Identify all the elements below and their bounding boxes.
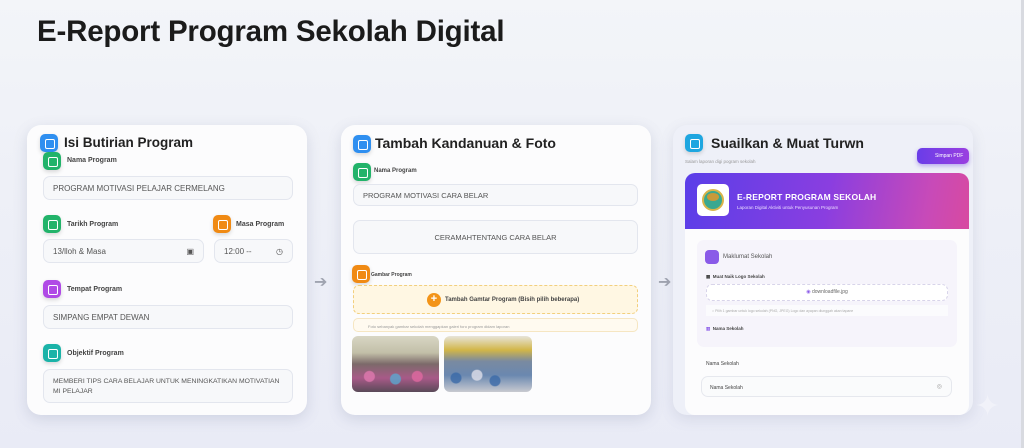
icon: header [685, 134, 703, 152]
label: Nama Sekolah [706, 361, 739, 367]
icon [705, 250, 719, 264]
photo 1 [352, 336, 439, 392]
input masa: 12:00 -- [224, 246, 252, 256]
input objektif: MI PELAJAR [53, 388, 93, 394]
label: Gambar Program [371, 272, 412, 278]
input [353, 184, 638, 206]
icon: header [40, 134, 58, 152]
icon: objektif [43, 344, 61, 362]
input tempat [43, 305, 293, 329]
input: PROGRAM MOTIVASI CARA BELAR [363, 190, 488, 200]
sublabel: ▦ Muat Naik Logo Sekolah [706, 274, 765, 279]
label: Nama Program [374, 168, 417, 174]
icon: tempat [43, 280, 61, 298]
arrow 1: ➔ [314, 274, 327, 291]
input tempat: SIMPANG EMPAT DEWAN [53, 312, 149, 322]
note [706, 305, 948, 316]
input: ◎ [937, 384, 942, 390]
box [353, 220, 638, 254]
note: Foto sebanyak gambar sekolah menggapkan galeri foro program didam laporan [368, 324, 509, 329]
input: Nama Sekolah [710, 385, 743, 391]
input [701, 376, 952, 397]
input objektif [43, 369, 293, 403]
inner panel [697, 240, 957, 347]
icon: gambar [352, 265, 370, 283]
icon: nama [353, 163, 371, 181]
panel: suailkan & muat turun [673, 125, 973, 415]
button [917, 148, 969, 164]
photo 2 [444, 336, 532, 392]
icon: header [353, 135, 371, 153]
label: Tarikh Program [67, 221, 118, 228]
label: Maklumat Sekolah [723, 254, 772, 260]
input tarikh: 13/lloh & Masa [53, 246, 106, 256]
subtitle: Salam laporan digi pogram sekolah [685, 159, 756, 164]
label: Masa Program [236, 221, 284, 228]
label: Tempat Program [67, 286, 122, 293]
banner [685, 173, 969, 229]
label: Objektif Program [67, 350, 124, 357]
input masa: ◷ [276, 246, 283, 256]
arrow 2: ➔ [658, 274, 671, 291]
panel: tambah kandanuan [341, 125, 651, 415]
icon: sparkle: ✦ [975, 390, 1000, 423]
banner title: E-REPORT PROGRAM SEKOLAH [737, 192, 876, 202]
label: Nama Program [67, 157, 117, 164]
icon: nama [43, 152, 61, 170]
heading: Tambah Kandanuan & Foto [375, 135, 556, 151]
scrollbar [1021, 0, 1024, 448]
icon: tarikh [43, 215, 61, 233]
button: Simpan PDF [935, 153, 963, 159]
box: CERAMAHTENTANG CARA BELAR [435, 232, 556, 242]
banner subtitle: Laporan Digital Aktiviti untuk Penyusunan Program [737, 205, 838, 210]
heading: Isi Butirian Program [64, 135, 193, 150]
input masa [214, 239, 293, 263]
input tarikh [43, 239, 204, 263]
icon: masa [213, 215, 231, 233]
upload box [353, 285, 638, 314]
note: ○ Pilih 1 gambar untuk logo sekolah (PNG, JPEG) Logo dan ayapan diunggah akan tapane [712, 309, 853, 313]
panel: isi butirian program [27, 125, 307, 415]
input tarikh: ▣ [186, 246, 194, 256]
input nama: PROGRAM MOTIVASI PELAJAR CERMELANG [53, 184, 225, 192]
note [353, 318, 638, 332]
upload [706, 284, 948, 301]
upload: ◉ downloadfile.jpg [806, 289, 848, 295]
sublabel: ▥ Nama Sekolah [706, 326, 744, 331]
report preview [685, 173, 969, 415]
upload box: Tambah Gamtar Program (Bisih pilih beberapa) [445, 297, 579, 303]
input nama [43, 176, 293, 200]
input objektif: MEMBERI TIPS CARA BELAJAR UNTUK MENINGKATIKAN MOTIVATIAN [53, 378, 279, 384]
title: E-Report Program Sekolah Digital [37, 15, 504, 48]
heading: Suailkan & Muat Turwn [711, 135, 864, 151]
upload box: + [431, 293, 437, 305]
logo [697, 184, 729, 216]
